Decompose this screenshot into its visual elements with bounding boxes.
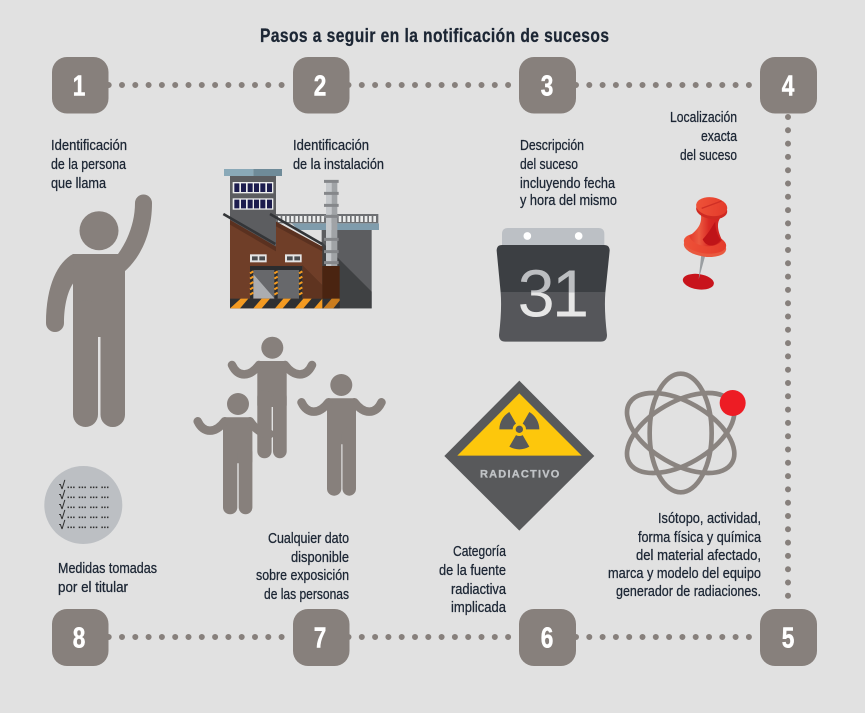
text: step 5: del material afectado, (636, 547, 761, 564)
icon: checklist circle: ... ... ... ... (67, 490, 109, 500)
text: step 8 (58, 560, 157, 596)
step 3 badge (519, 57, 576, 114)
text: step 5: generador de radiaciones. (616, 583, 761, 600)
icon: red push pin (682, 195, 728, 291)
step 1 badge: 1 (73, 69, 85, 102)
text: step 3: y hora del mismo (520, 192, 617, 209)
text: step 2: Identificación (293, 137, 369, 154)
step 4 badge (760, 57, 817, 114)
text: step 4: del suceso (680, 147, 737, 164)
text: step 1: que llama (51, 175, 107, 192)
hazard stripe (230, 299, 340, 308)
text: step 4 (670, 109, 738, 164)
loading doors (250, 266, 302, 299)
text: step 3: del suceso (520, 156, 578, 173)
brick walls (230, 220, 322, 308)
icon: checklist circle: √ (59, 479, 66, 492)
icon: calendar (497, 228, 610, 342)
title: Pasos a seguir en la notificación de sucesos (260, 25, 609, 46)
step 2 badge: 2 (314, 69, 326, 102)
icon: checklist circle: √ (59, 489, 66, 502)
text: step 6: radiactiva (451, 581, 507, 598)
step 6 badge: 6 (541, 621, 553, 654)
text: step 1: Identificación (51, 137, 127, 154)
icon: checklist circle: √ (59, 519, 66, 532)
calendar date: 31 (518, 258, 589, 332)
step 7 badge: 7 (314, 621, 326, 654)
step 3 badge: 3 (541, 69, 553, 102)
text: step 5: Isótopo, actividad, (658, 510, 761, 527)
text: step 7: Cualquier dato (268, 530, 349, 547)
person: right (302, 374, 382, 496)
step 7 badge (293, 609, 350, 666)
small windows (250, 254, 302, 262)
text: step 7: sobre exposición (256, 567, 349, 584)
text: step 6: de la fuente (439, 562, 506, 579)
icon: checklist circle (44, 466, 122, 544)
text: step 1: de la persona (51, 156, 127, 173)
diamond label: RADIACTIVO (480, 468, 560, 480)
text: step 1 (51, 137, 127, 192)
step 6 badge (519, 609, 576, 666)
step 2 badge (293, 57, 350, 114)
radiation trefoil (499, 412, 539, 449)
text: step 3 (520, 137, 617, 209)
step 5 badge (760, 609, 817, 666)
icon: group of three people (198, 337, 382, 514)
person: back centre (232, 337, 312, 458)
chimney (324, 180, 339, 266)
text: step 5: forma física y química (638, 529, 762, 546)
text: step 7: de las personas (264, 586, 349, 603)
text: step 8: Medidas tomadas (58, 560, 157, 577)
step 4 badge: 4 (782, 69, 795, 102)
step 1 badge (52, 57, 108, 114)
electron (720, 390, 746, 416)
person: front left (198, 393, 270, 514)
text: step 2 (293, 137, 384, 173)
step 5 badge: 5 (782, 621, 794, 654)
icon: radioactive hazard diamond (444, 381, 594, 531)
text: step 5: marca y modelo del equipo (608, 565, 761, 582)
text: step 7 (256, 530, 349, 603)
icon: person raising arm (46, 194, 152, 427)
text: step 4: Localización (670, 109, 737, 126)
step 8 badge (52, 609, 108, 666)
text: step 7: disponible (291, 549, 349, 566)
icon: checklist circle: ... ... ... ... (67, 520, 109, 530)
text: step 3: Descripción (520, 137, 584, 154)
icon: checklist circle: ... ... ... ... (67, 500, 109, 510)
icon: checklist circle: √ (59, 499, 66, 512)
icon: atom (614, 374, 748, 492)
icon: checklist circle: ... ... ... ... (67, 480, 109, 490)
text: step 6: Categoría (453, 543, 507, 560)
step 8 badge: 8 (73, 621, 85, 654)
text: step 5 (608, 510, 762, 600)
text: step 3: incluyendo fecha (520, 175, 616, 192)
text: step 6 (439, 543, 507, 616)
icon: checklist circle: ... ... ... ... (67, 510, 109, 520)
railing (276, 214, 378, 223)
tower (224, 169, 282, 248)
text: step 2: de la instalación (293, 156, 384, 173)
icon: factory (223, 169, 379, 308)
icon: checklist circle: √ (59, 509, 66, 522)
text: step 8: por el titular (58, 579, 128, 596)
text: step 6: implicada (451, 599, 507, 616)
text: step 4: exacta (701, 128, 738, 145)
